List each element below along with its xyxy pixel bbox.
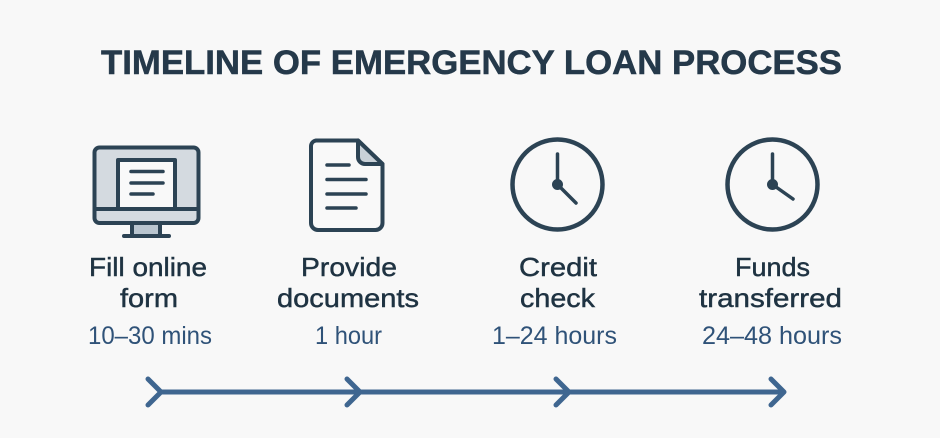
icon: document (311, 140, 382, 230)
icon: computer monitor with form (94, 148, 198, 236)
step 1 label: 10–30 mins (88, 322, 212, 350)
title: TIMELINE OF EMERGENCY LOAN PROCESS (101, 44, 842, 82)
step 4 label (699, 252, 842, 350)
step 3 label: Credit (519, 252, 598, 282)
step 3 label (492, 252, 617, 350)
step 1 label: Fill online (89, 252, 207, 282)
icon: clock two (728, 140, 818, 230)
step 3 label: 1–24 hours (492, 322, 617, 350)
timeline arrow (148, 379, 784, 405)
step 2 label: documents (277, 283, 419, 313)
step 2 label: Provide (301, 252, 397, 282)
step 3 label: check (520, 283, 596, 313)
step 4 label: Funds (735, 252, 810, 282)
step 4 label: 24–48 hours (702, 322, 842, 350)
step 1 label: form (120, 283, 178, 313)
step 2 label (277, 252, 419, 350)
step 4 label: transferred (699, 283, 842, 313)
icon: clock one (512, 140, 602, 230)
step 2 label: 1 hour (315, 322, 382, 350)
step 1 label (88, 252, 212, 350)
